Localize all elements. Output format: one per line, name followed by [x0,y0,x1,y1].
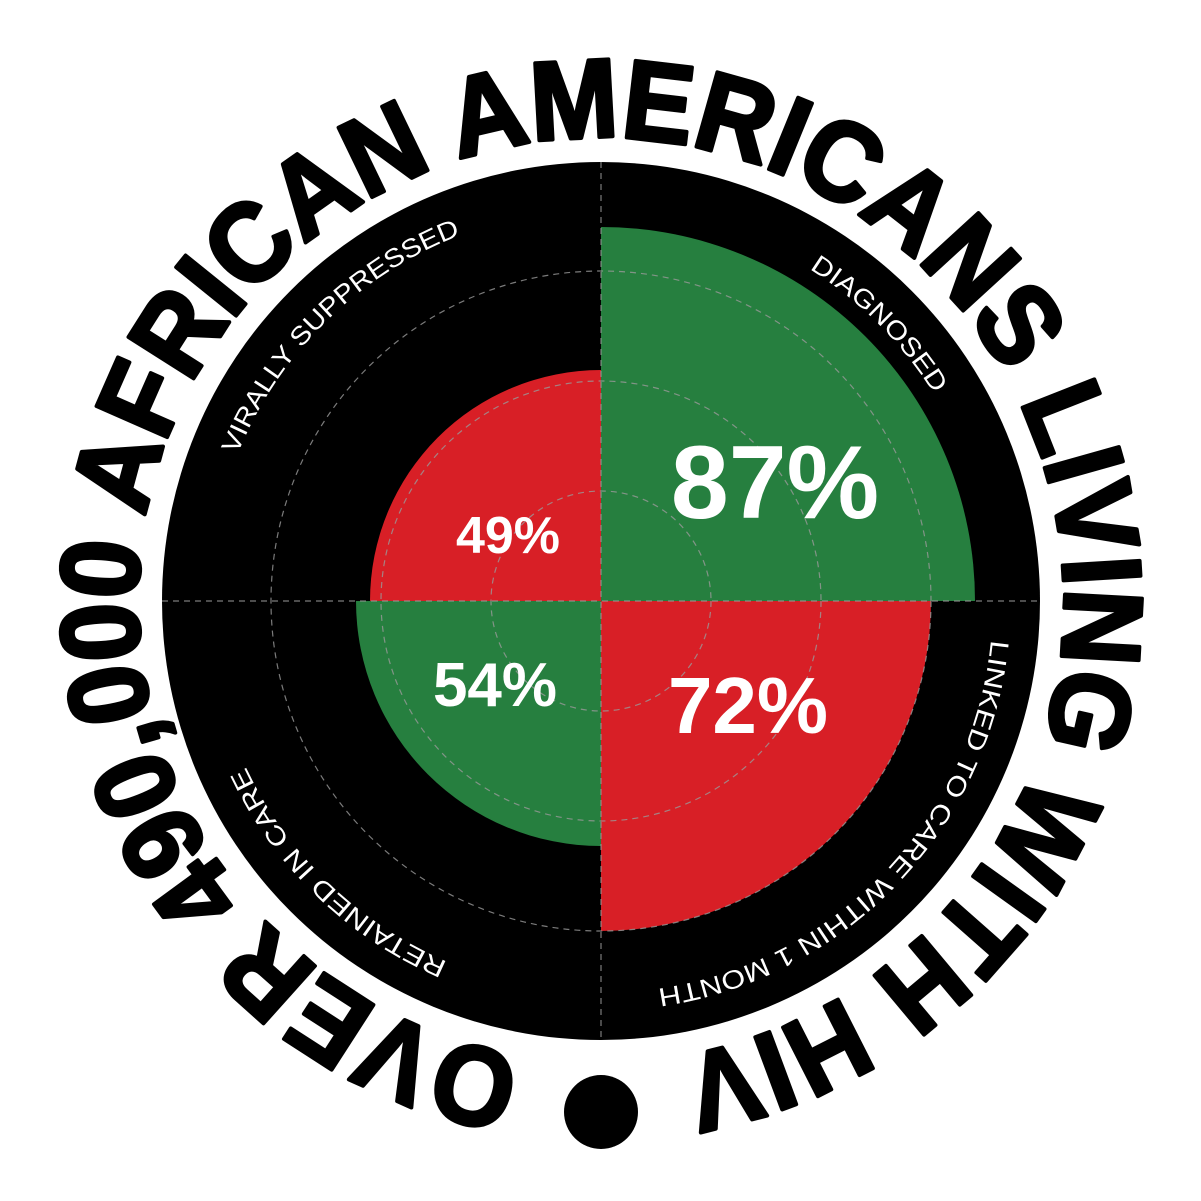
quadrant: retained in care 54% [356,601,601,846]
value: 54%: 54% [433,651,557,720]
label: diagnosed: DIAGNOSED [811,255,945,390]
circular title: OVER 490,000 AFRICAN AMERICANS LIVING WITH HIV [58,57,1144,1134]
label: virally suppressed: VIRALLY SUPPRESSED [220,222,457,448]
black disc [162,162,1040,1040]
quadrant: linked to care 72% [601,601,931,931]
bullet dot [564,1075,638,1149]
value: 87%: 87% [671,425,879,541]
label: linked to care: LINKED TO CARE WITHIN 1 MONTH [660,642,1009,1006]
quadrant: diagnosed 87% [601,227,975,601]
quadrant: virally suppressed 49% [370,370,601,601]
label: retained in care: RETAINED IN CARE [230,768,446,978]
value: 49%: 49% [456,507,560,565]
value: 72%: 72% [668,661,828,750]
